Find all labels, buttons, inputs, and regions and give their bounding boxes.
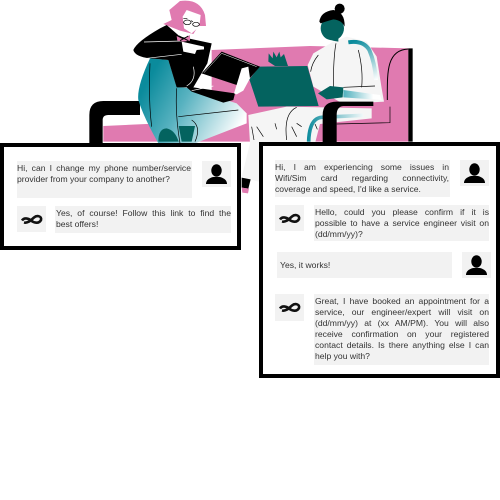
text: bot confirmation: contact details. Is there anything else I can [315,340,489,350]
icon: user 1 [202,161,231,187]
front sofa arm [323,102,373,143]
text: customer question 1: provider from your company to another? [17,174,170,184]
text: customer issue: coverage and speed, I'd like a service. [275,184,421,194]
text: bot answer 1: best offers! [56,218,98,228]
text: bot request: possible to have a service engineer visit on [315,218,489,228]
panel: long chat [259,142,500,378]
text: bot confirmation: receive confirmation on your registered [315,328,489,338]
text: bot confirmation [315,296,490,360]
text: bot answer 1 [56,208,231,228]
person left [133,1,260,143]
text: bot request: Hello, could you please confirm if it is [315,206,489,216]
bubble: bot request [314,205,489,241]
illustration: two women on a sofa [89,0,413,194]
person right: torso and head [268,4,384,104]
text: bot confirmation: service, our engineer/expert will visit on [315,306,489,316]
icon: bot logo 3 [275,294,304,321]
text: customer question 1: Hi, can I change my phone number/service [17,162,191,172]
laptop [249,66,319,107]
text: customer issue [275,162,449,194]
bubble: bot confirmation [314,294,489,365]
text: bot request: (dd/mm/yy)? [315,228,363,238]
bubble: bot answer 1 [55,206,231,233]
icon: user 2 [460,160,489,186]
person right: hand [318,86,343,99]
icon: bot logo 1 [17,206,46,232]
text: customer question 1 [17,162,191,184]
bubble: customer issue [275,160,450,197]
text: bot confirmation: Great, I have booked an appointment for a [315,296,489,306]
text: bot confirmation: (dd/mm/yy) at (xx AM/PM). You will also [315,318,489,328]
text: customer issue: Hi, I am experiencing some issues in [275,162,449,172]
text: customer issue: Wifi/Sim card regarding connectivity, [275,172,449,182]
person right: legs [242,107,372,193]
text: bot request [315,206,489,238]
sofa [89,46,413,143]
icon: bot logo 2 [275,205,304,231]
icon: user 3 [462,252,491,278]
bubble: customer question 1 [17,161,192,198]
panel: short chat [0,143,241,250]
text: customer reply: Yes, it works! [280,260,330,270]
bubble: customer reply [277,252,452,278]
text: bot answer 1: Yes, of course! Follow this link to find the [56,208,231,218]
text: bot confirmation: help you with? [315,350,370,360]
